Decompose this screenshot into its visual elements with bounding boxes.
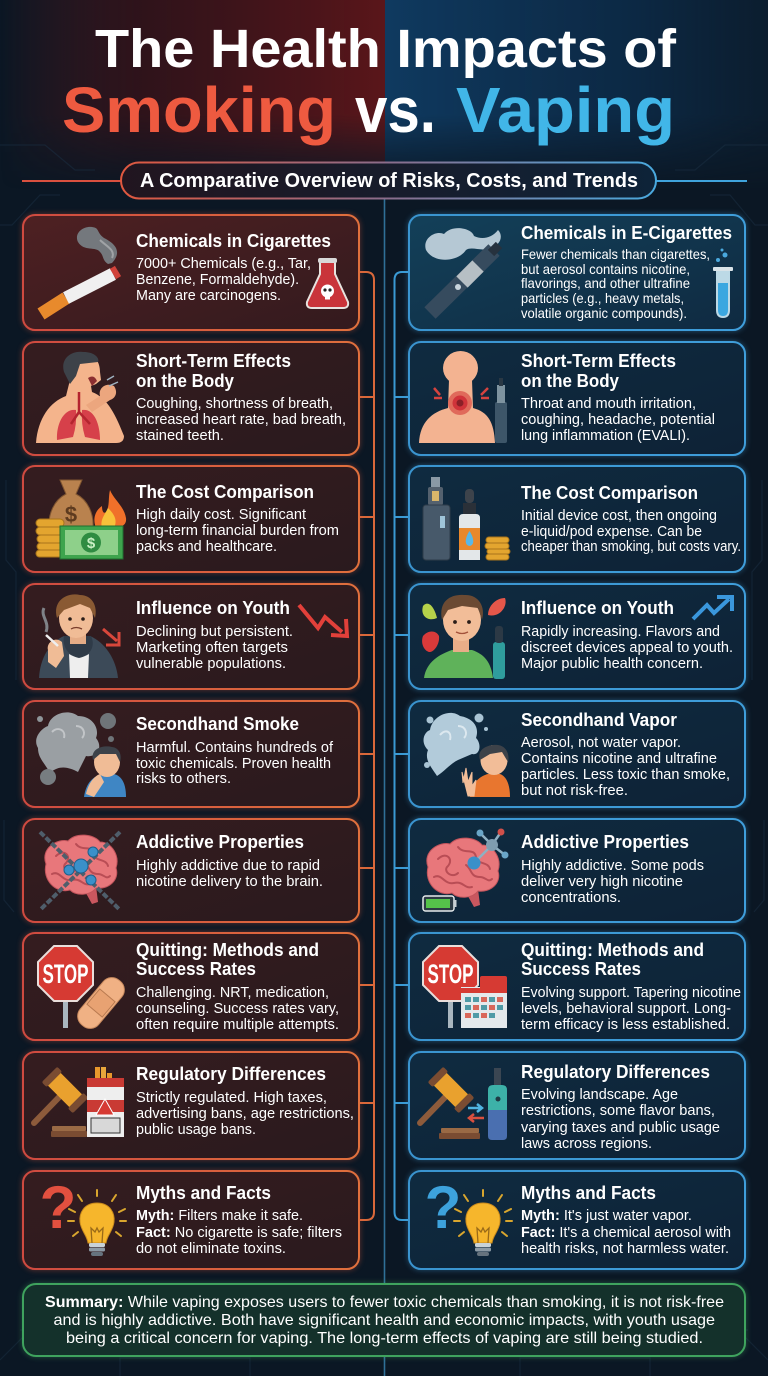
icon: gavel and cigarette pack — [34, 1067, 124, 1137]
heading: Quitting: Methods and — [521, 940, 704, 960]
body text: varying taxes and public usage — [521, 1120, 720, 1136]
heading: Influence on Youth — [521, 598, 674, 618]
body text: particles (e.g., heavy metals, — [521, 290, 684, 306]
heading: The Cost Comparison — [521, 483, 698, 503]
body text — [521, 1087, 720, 1152]
body text: Challenging. NRT, medication, — [136, 985, 329, 1001]
icon: vapor cloud and person — [424, 713, 510, 797]
icon: teen with cigarette — [39, 594, 119, 678]
heading: Short-Term Effects — [136, 351, 291, 371]
heading: Myths and Facts — [521, 1183, 656, 1203]
body text: Coughing, shortness of breath, — [136, 396, 333, 412]
body text: Evolving support. Tapering nicotine — [521, 985, 741, 1001]
body text — [136, 396, 346, 444]
body text: lung inflammation (EVALI). — [521, 428, 690, 444]
body text: Fact: It's a chemical aerosol with — [521, 1225, 731, 1241]
body text — [521, 735, 730, 799]
icon: rising trend arrow — [693, 597, 732, 619]
icon: irritated throat and vape — [419, 351, 507, 443]
body text: but aerosol contains nicotine, — [521, 261, 690, 277]
body text: Highly addictive. Some pods — [521, 858, 704, 874]
body text: but not risk-free. — [521, 783, 628, 799]
body text: term efficacy is less established. — [521, 1017, 730, 1033]
heading — [136, 351, 291, 391]
heading: Secondhand Vapor — [521, 710, 677, 730]
body text: Highly addictive due to rapid — [136, 858, 320, 874]
icon: chained brain — [40, 832, 120, 910]
body text: restrictions, some flavor bans, — [521, 1103, 715, 1119]
heading — [136, 940, 319, 979]
body text: vulnerable populations. — [136, 656, 286, 672]
body text — [136, 1090, 354, 1138]
heading: Chemicals in Cigarettes — [136, 231, 331, 251]
body text: Fewer chemicals than cigarettes, — [521, 246, 710, 262]
icon: lit cigarette with smoke — [41, 227, 118, 314]
icon: teen with flavors and vape — [422, 595, 506, 679]
panel: addictive properties smoking — [23, 819, 359, 922]
body text: Strictly regulated. High taxes, — [136, 1090, 327, 1106]
panel: summary — [23, 1284, 745, 1356]
body text: Myth: Filters make it safe. — [136, 1208, 303, 1224]
heading: Success Rates — [136, 959, 256, 979]
body text: toxic chemicals. Proven health — [136, 756, 331, 772]
icon: stop sign and bandage: STOP — [42, 959, 88, 989]
panel: short-term effects smoking — [23, 342, 359, 455]
body text: Initial device cost, then ongoing — [521, 508, 717, 524]
body text — [136, 740, 334, 787]
icon: question mark and light bulb — [425, 1174, 512, 1256]
body text: flavorings, and other ultrafine — [521, 275, 690, 291]
summary text — [45, 1294, 724, 1347]
body text — [521, 508, 741, 555]
heading: Addictive Properties — [521, 832, 689, 852]
title: Smoking — [62, 74, 336, 146]
icon: gavel and vape — [420, 1067, 507, 1140]
body text: concentrations. — [521, 890, 621, 906]
title — [62, 19, 677, 146]
body text: do not eliminate toxins. — [136, 1241, 286, 1257]
body text — [521, 985, 741, 1033]
title: vs. — [355, 74, 436, 146]
body text: Marketing often targets — [136, 640, 288, 656]
icon: flask with skull — [307, 258, 348, 308]
icon: money bag, coins, cash, fire: $ — [65, 502, 77, 527]
body text: counseling. Success rates vary, — [136, 1001, 339, 1017]
body text: volatile organic compounds). — [521, 305, 687, 321]
body text: Many are carcinogens. — [136, 288, 281, 304]
body text: Fact: No cigarette is safe; filters — [136, 1225, 342, 1241]
heading — [521, 940, 704, 979]
icon: money bag, coins, cash, fire — [36, 480, 126, 559]
body text — [521, 396, 715, 444]
heading: Secondhand Smoke — [136, 714, 299, 734]
body text: advertising bans, age restrictions, — [136, 1106, 354, 1122]
body text: Declining but persistent. — [136, 624, 293, 640]
body text: Harmful. Contains hundreds of — [136, 740, 334, 756]
body text: health risks, not harmless water. — [521, 1241, 729, 1257]
body text: e-liquid/pod expense. Can be — [521, 524, 702, 540]
panel: quitting vaping — [409, 933, 745, 1040]
body text: Contains nicotine and ultrafine — [521, 751, 717, 767]
panel: cost comparison smoking — [23, 466, 359, 572]
summary text: being a critical concern for vaping. The long-term effects of vaping are still being studied. — [66, 1330, 703, 1347]
icon: test tube with droplets — [713, 248, 733, 318]
panel: regulatory differences vaping — [409, 1052, 745, 1159]
center divider line — [384, 199, 386, 1376]
body text — [521, 858, 704, 906]
icon: vape pen with cloud — [425, 228, 501, 313]
icon: question mark and light bulb: ? — [425, 1174, 461, 1241]
icon: brain with nicotine molecule and battery — [423, 828, 508, 911]
heading: Regulatory Differences — [521, 1062, 710, 1082]
icon: question mark and light bulb: ? — [40, 1174, 76, 1241]
body text: Benzene, Formaldehyde). — [136, 272, 299, 288]
icon: stop sign and calendar: STOP — [428, 959, 474, 989]
panel: cost comparison vaping — [409, 466, 745, 572]
heading: Myths and Facts — [136, 1183, 271, 1203]
subtitle pill — [22, 162, 747, 198]
body text — [136, 1208, 342, 1257]
connector: right bus — [394, 272, 408, 1220]
body text: risks to others. — [136, 771, 231, 787]
panel: secondhand smoke — [23, 701, 359, 807]
summary text: and is highly addictive. Both have significant health and economic impacts, with youth usage — [54, 1312, 715, 1329]
connector: left bus — [360, 272, 374, 1220]
body text: often require multiple attempts. — [136, 1017, 339, 1033]
heading: on the Body — [136, 371, 234, 391]
panel: myths and facts smoking — [23, 1171, 359, 1269]
subtitle pill: A Comparative Overview of Risks, Costs, and Trends — [140, 170, 638, 192]
panel: influence on youth smoking — [23, 584, 359, 689]
panel: secondhand vapor — [409, 701, 745, 807]
heading: Short-Term Effects — [521, 351, 676, 371]
icon: smoke cloud and coughing person — [36, 712, 126, 797]
body text: Evolving landscape. Age — [521, 1087, 678, 1103]
panel: short-term effects vaping — [409, 342, 745, 455]
heading: Regulatory Differences — [136, 1064, 326, 1084]
heading — [521, 351, 676, 391]
body text — [136, 858, 323, 890]
panel: chemicals in e-cigarettes — [409, 215, 745, 330]
body text — [136, 624, 293, 672]
panel: chemicals in cigarettes — [23, 215, 359, 330]
heading: on the Body — [521, 371, 619, 391]
body text: Major public health concern. — [521, 656, 703, 672]
panel: myths and facts vaping — [409, 1171, 745, 1269]
panel: addictive properties vaping — [409, 819, 745, 922]
heading: The Cost Comparison — [136, 482, 314, 502]
body text — [521, 624, 733, 672]
body text: increased heart rate, bad breath, — [136, 412, 346, 428]
body text: laws across regions. — [521, 1136, 652, 1152]
body text: High daily cost. Significant — [136, 507, 306, 523]
body text: public usage bans. — [136, 1122, 256, 1138]
body text: Throat and mouth irritation, — [521, 396, 696, 412]
body text — [521, 246, 710, 321]
summary text: Summary: While vaping exposes users to fewer toxic chemicals than smoking, it is not risk-free — [45, 1294, 724, 1311]
body text: cheaper than smoking, but costs vary. — [521, 539, 741, 555]
title: Vaping — [456, 74, 675, 146]
body text: Rapidly increasing. Flavors and — [521, 624, 720, 640]
heading: Success Rates — [521, 959, 641, 979]
body text: nicotine delivery to the brain. — [136, 874, 323, 890]
body text — [136, 985, 339, 1033]
body text: deliver very high nicotine — [521, 874, 683, 890]
body text: stained teeth. — [136, 428, 224, 444]
body text: Myth: It's just water vapor. — [521, 1208, 692, 1224]
body text: long-term financial burden from — [136, 523, 339, 539]
panel: quitting smoking — [23, 933, 359, 1040]
title: The Health Impacts of — [95, 19, 677, 79]
panel: regulatory differences smoking — [23, 1052, 359, 1159]
body text — [136, 507, 339, 555]
body text — [136, 256, 311, 304]
heading: Influence on Youth — [136, 598, 290, 618]
icon: declining trend arrow — [299, 605, 347, 636]
body text: levels, behavioral support. Long- — [521, 1001, 731, 1017]
body text: packs and healthcare. — [136, 539, 277, 555]
icon: money bag, coins, cash, fire: $ — [87, 535, 96, 552]
heading: Quitting: Methods and — [136, 940, 319, 960]
heading: Chemicals in E-Cigarettes — [521, 223, 732, 243]
body text: particles. Less toxic than smoke, — [521, 767, 730, 783]
heading: Addictive Properties — [136, 832, 304, 852]
panel: influence on youth vaping — [409, 584, 745, 689]
icon: question mark and light bulb — [40, 1174, 126, 1256]
body text: discreet devices appeal to youth. — [521, 640, 733, 656]
icon: coughing man with lungs — [36, 352, 124, 443]
body text: coughing, headache, potential — [521, 412, 715, 428]
icon: stop sign and calendar — [423, 946, 507, 1028]
body text: Aerosol, not water vapor. — [521, 735, 681, 751]
icon: stop sign and bandage — [38, 946, 129, 1033]
body text — [521, 1208, 731, 1257]
body text: 7000+ Chemicals (e.g., Tar, — [136, 256, 311, 272]
icon: vape mod, e-liquid bottle, coins — [423, 477, 510, 560]
